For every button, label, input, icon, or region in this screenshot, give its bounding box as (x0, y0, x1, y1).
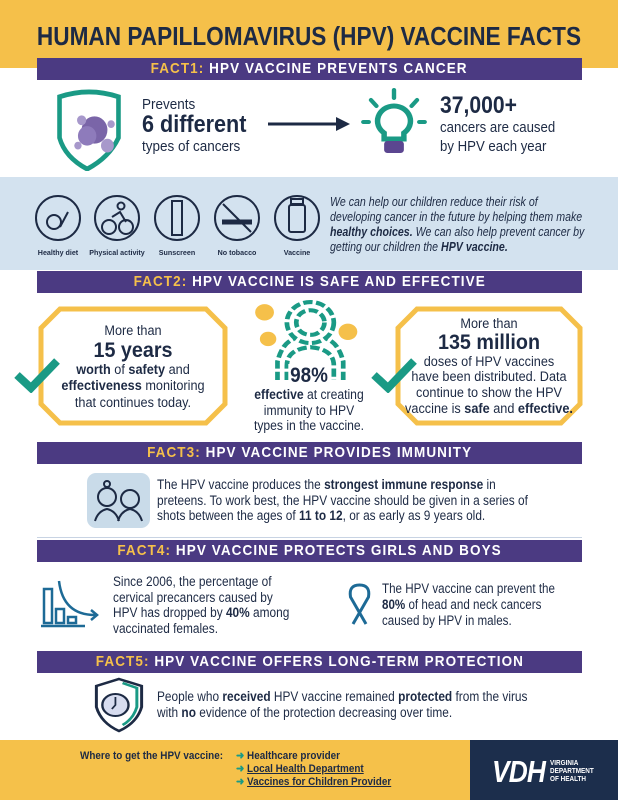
icon: person immunity (255, 300, 358, 380)
fact2 heading (37, 271, 582, 293)
fact1 heading (37, 58, 582, 80)
fact1 heading: FACT1: HPV VACCINE PREVENTS CANCER (151, 60, 468, 77)
text: fact4 left: Since 2006, the percentage of (113, 574, 272, 589)
logo: VDH: OF HEALTH (550, 774, 586, 783)
text: prevents 6 types (142, 96, 246, 155)
text: fact5 (157, 689, 527, 720)
text: 98% (254, 364, 364, 433)
box: 15 years: 15 years (93, 338, 173, 362)
text: fact4 right (382, 581, 555, 628)
fact5 heading: FACT5: HPV VACCINE OFFERS LONG-TERM PROTECTION (95, 653, 524, 670)
text: fact4 left: HPV has dropped by 40% among (113, 605, 289, 620)
icons row: Physical activity (89, 248, 145, 257)
text: fact4 left (113, 574, 289, 636)
text: 37,000: cancers are caused (440, 119, 555, 136)
text: fact3: preteens. To work best, the HPV vaccine should be given in a series of (157, 492, 528, 508)
fact3 heading: FACT3: HPV VACCINE PROVIDES IMMUNITY (147, 444, 472, 461)
text: fact5: with no evidence of the protection decreasing over time. (157, 705, 452, 720)
icon: check left (14, 358, 60, 393)
text: prevents 6 types: types of cancers (142, 138, 240, 155)
header band (0, 0, 618, 68)
text: fact4 left: vaccinated females. (113, 621, 218, 636)
box: 15 years: effectiveness monitoring (61, 378, 205, 393)
icon: lightbulb (361, 88, 427, 153)
icons row: No tobacco (218, 248, 256, 257)
box: 15 years: worth of safety and (76, 362, 190, 376)
footer (0, 740, 470, 800)
text: 98%: types in the vaccine. (254, 418, 364, 433)
text: 37,000: 37,000+ (440, 92, 517, 119)
fact5 heading (37, 651, 582, 673)
text: 37,000 (440, 92, 555, 155)
text: paragraph: We can help our children reduce their risk of (330, 195, 538, 209)
text: prevents 6 types: Prevents (142, 96, 195, 113)
list: locations: ➜ Healthcare provider (236, 750, 340, 762)
text: paragraph: developing cancer in the future by helping them make (330, 210, 582, 224)
list: locations (236, 750, 392, 788)
text: fact4 right: The HPV vaccine can prevent the (382, 581, 555, 596)
text: fact5: People who received HPV vaccine remained protected from the virus (157, 689, 527, 704)
text: 98%: 98% (290, 364, 328, 387)
box: 15 years (38, 306, 228, 426)
box: 135 million: continue to show the HPV (416, 385, 562, 400)
icons row: Sunscreen (159, 248, 195, 257)
text: fact3: shots between the ages of 11 to 12, or as early as 9 years old. (157, 508, 485, 523)
icons row: Healthy diet (38, 248, 78, 257)
icons row: Vaccine (284, 248, 310, 257)
text: paragraph (330, 195, 585, 254)
box: 135 million: vaccine is safe and effective. (405, 401, 573, 416)
text: 98%: immunity to HPV (264, 402, 354, 418)
text: paragraph: healthy choices. We can also help prevent cancer by (330, 225, 584, 239)
logo: VDH: VDH (492, 754, 545, 789)
logo: VDH (470, 740, 618, 800)
box: 15 years: More than (104, 323, 162, 338)
icon: chart decline (41, 580, 99, 628)
fact4 heading (37, 540, 582, 562)
icon: shield virus (57, 90, 121, 171)
text: fact4 right: 80% of head and neck cancers (382, 597, 541, 612)
text: 98%: effective at creating (254, 387, 364, 402)
icon: ribbon (348, 584, 370, 625)
text: 37,000: by HPV each year (440, 138, 546, 155)
list: locations: ➜ Vaccines for Children Provider (236, 776, 391, 788)
box: 15 years: that continues today. (75, 394, 191, 410)
text: fact4 right: caused by HPV in males. (382, 613, 512, 628)
text: fact4 left: cervical precancers caused by (113, 590, 273, 605)
logo: VDH: VIRGINIA (550, 758, 578, 767)
text: where to get: Where to get the HPV vaccine: (80, 750, 223, 762)
logo: VDH: DEPARTMENT (550, 766, 594, 775)
icons row (35, 195, 320, 257)
box: 135 million: More than (460, 316, 518, 331)
box: 135 million: 135 million (438, 331, 540, 354)
box: 135 million: doses of HPV vaccines (424, 354, 554, 369)
icon: shield clock (94, 678, 144, 732)
box: 135 million: have been distributed. Data (411, 369, 567, 384)
text: fact3 (157, 477, 528, 523)
icon: check right (371, 358, 417, 393)
text: paragraph: getting our children the HPV vaccine. (330, 240, 508, 254)
title: HUMAN PAPILLOMAVIRUS (HPV) VACCINE FACTS (37, 21, 581, 51)
fact4 heading: FACT4: HPV VACCINE PROTECTS GIRLS AND BOYS (117, 542, 502, 559)
box: 135 million (396, 306, 582, 426)
text: fact3: The HPV vaccine produces the strongest immune response in (157, 477, 496, 492)
panel: healthy choices (0, 177, 618, 270)
arrow (268, 117, 350, 131)
list: locations: ➜ Local Health Department (236, 763, 364, 775)
fact2 heading: FACT2: HPV VACCINE IS SAFE AND EFFECTIVE (133, 273, 486, 290)
text: prevents 6 types: 6 different (142, 110, 246, 138)
icon: children (87, 473, 150, 528)
fact3 heading (37, 442, 582, 464)
